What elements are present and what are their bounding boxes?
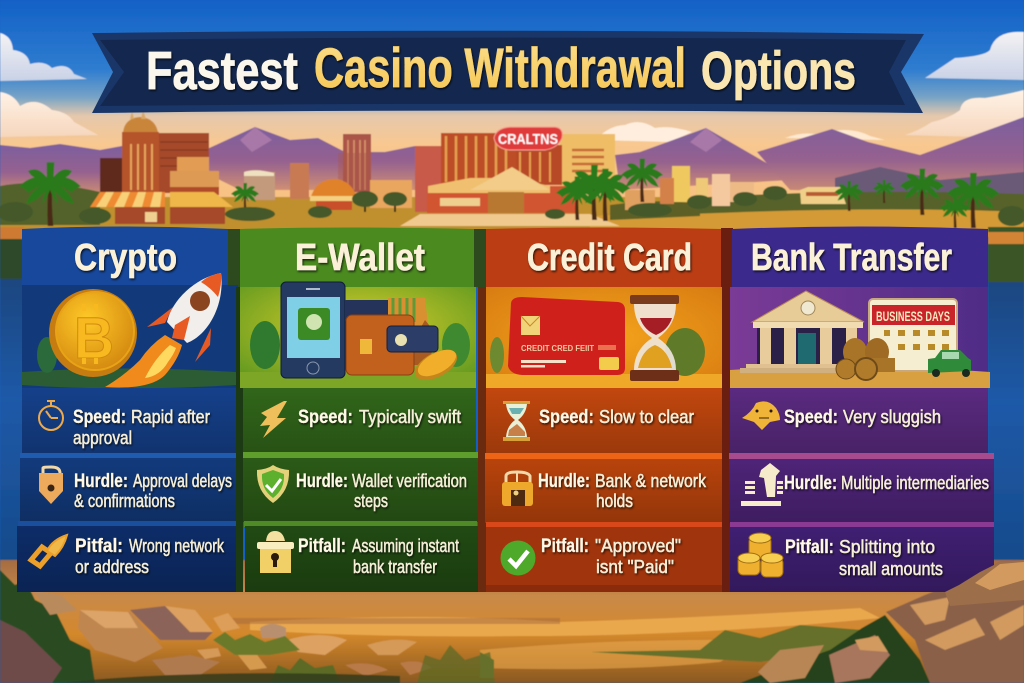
credit row: pitfall	[486, 522, 722, 592]
casino sign: CRALTNS	[498, 131, 558, 148]
gaps between headers	[228, 229, 486, 287]
bank hurdle text: Multiple intermediaries	[841, 473, 989, 493]
bank header	[732, 226, 988, 287]
credit card header	[486, 228, 721, 287]
title text: Casino Withdrawal	[314, 36, 686, 99]
credit hurdle text: Bank & network	[595, 471, 707, 491]
crypto illustration	[22, 273, 238, 388]
crypto header	[22, 226, 228, 287]
bank row: pitfall	[730, 522, 994, 592]
crypto hurdle text	[74, 471, 232, 511]
bank illustration	[730, 287, 990, 388]
icon: green car	[928, 350, 971, 377]
e-wallet row: speed	[243, 388, 476, 453]
crypto hurdle text: Approval delays	[133, 471, 232, 491]
bank speed text: Speed:	[784, 407, 838, 428]
icon: wallet	[345, 298, 438, 375]
bank row: hurdle	[729, 453, 994, 523]
e-wallet illustration	[240, 282, 476, 388]
icon: bank building	[740, 291, 864, 373]
e-wallet row: pitfall	[244, 521, 478, 592]
bank header: Bank Transfer	[751, 237, 952, 279]
credit hurdle text	[538, 471, 707, 511]
crypto row: pitfall	[17, 521, 238, 592]
crypto pitfall text: Wrong network	[129, 536, 225, 556]
casino sign	[494, 127, 562, 150]
icon: bitcoin coin	[49, 289, 137, 377]
bank hurdle text: Hurdle:	[784, 473, 837, 494]
e-wallet speed text: Typically swift	[359, 407, 461, 427]
icon: gold padlock	[502, 472, 533, 506]
icon: credit card	[508, 297, 625, 375]
e-wallet hurdle text: Wallet verification	[352, 471, 467, 491]
water and shore	[0, 227, 1024, 572]
rocks and grass left	[0, 570, 495, 683]
mountains	[0, 117, 1024, 205]
bank row: speed	[730, 388, 988, 453]
e-wallet row: hurdle	[243, 452, 479, 522]
icon: bank lock	[257, 531, 294, 573]
crypto speed text: Speed:	[73, 407, 126, 428]
credit card header: Credit Card	[527, 237, 692, 279]
crypto speed text: approval	[73, 428, 132, 448]
credit hurdle text: Hurdle:	[538, 471, 590, 492]
rocks and grass right	[480, 560, 1024, 683]
icon: calendar	[869, 299, 957, 371]
icon: slow snail creature	[742, 401, 780, 430]
crypto speed text	[73, 407, 210, 448]
round trees and bushes	[0, 186, 1024, 226]
panel: bank transfer	[729, 226, 994, 592]
crypto row: speed	[22, 388, 238, 453]
icon: green check	[500, 540, 536, 576]
title text: Fastest	[146, 41, 298, 101]
icon: stopwatch	[39, 401, 63, 430]
e-wallet hurdle text: steps	[354, 491, 388, 511]
credit pitfall text: Pitfall:	[541, 536, 589, 557]
city right	[625, 166, 846, 210]
bank pitfall text: small amounts	[839, 559, 943, 579]
crypto hurdle text: Hurdle:	[74, 471, 128, 492]
icon: shield check	[257, 465, 289, 503]
clouds	[0, 32, 1024, 142]
e-wallet header	[240, 228, 474, 287]
path highlights	[230, 608, 880, 669]
title text: Options	[701, 41, 856, 101]
icon: small hourglass	[503, 401, 530, 441]
title banner	[92, 31, 924, 113]
e-wallet pitfall text: bank transfer	[353, 557, 437, 577]
icon: tractor and sacks	[836, 338, 895, 380]
bank pitfall text: Splitting into	[839, 537, 935, 557]
crypto row: hurdle	[20, 453, 238, 522]
panel: credit card	[478, 228, 733, 592]
e-wallet speed text: Speed:	[298, 407, 353, 428]
panel: crypto	[17, 226, 238, 592]
icon: gold coin	[410, 344, 462, 386]
icon: lightning	[260, 401, 287, 438]
icon: intermediaries arrow	[741, 463, 783, 506]
credit row: hurdle	[485, 453, 722, 523]
bank speed text: Very sluggish	[843, 407, 941, 427]
left casino	[90, 110, 233, 224]
e-wallet pitfall text	[298, 536, 459, 577]
credit speed text: Speed:	[539, 407, 594, 428]
e-wallet pitfall text: Pitfall:	[298, 536, 346, 557]
credit card illustration	[486, 287, 722, 388]
bank pitfall text: Pitfall:	[785, 537, 834, 558]
e-wallet hurdle text: Hurdle:	[296, 471, 348, 492]
credit hurdle text: holds	[596, 491, 633, 511]
city left	[244, 134, 412, 210]
bank speed text	[784, 407, 941, 428]
palm trees	[19, 158, 1000, 228]
icon: hourglass	[630, 295, 679, 381]
credit row: speed	[486, 388, 722, 453]
credit speed text	[539, 407, 694, 428]
icon: coin stacks	[738, 533, 783, 577]
icon: padlock	[39, 467, 63, 504]
credit pitfall text: isnt "Paid"	[596, 557, 674, 577]
title text	[146, 36, 856, 101]
ground horizon	[0, 183, 1024, 237]
bank hurdle text	[784, 473, 989, 494]
crypto speed text: Rapid after	[131, 407, 210, 427]
crypto hurdle text: & confirmations	[74, 491, 175, 511]
icon: phone	[281, 282, 345, 378]
crypto pitfall text: or address	[75, 557, 149, 577]
icon: calendar: BUSINESS DAYS	[876, 308, 950, 324]
icon: broken chain	[31, 535, 67, 566]
e-wallet speed text	[298, 407, 461, 428]
rock overlapping bank panel	[945, 560, 1024, 606]
foreground ground	[0, 560, 1024, 683]
credit speed text: Slow to clear	[599, 407, 694, 427]
crypto pitfall text	[75, 536, 225, 577]
icon: bitcoin coin: B	[74, 306, 114, 371]
crypto header: Crypto	[74, 237, 177, 279]
panel: e-wallet	[236, 228, 479, 592]
crypto pitfall text: Pitfal:	[75, 536, 123, 557]
sky	[0, 0, 1024, 232]
central casino	[415, 127, 615, 213]
e-wallet header: E-Wallet	[295, 237, 425, 279]
icon: credit card: CREDIT CRED FEIIT	[521, 344, 594, 353]
e-wallet pitfall text: Assuming instant	[352, 536, 459, 556]
credit pitfall text	[541, 536, 681, 577]
e-wallet hurdle text	[296, 471, 467, 511]
credit pitfall text: "Approved"	[595, 536, 681, 556]
bank pitfall text	[785, 537, 943, 579]
icon: rocket	[105, 273, 222, 388]
